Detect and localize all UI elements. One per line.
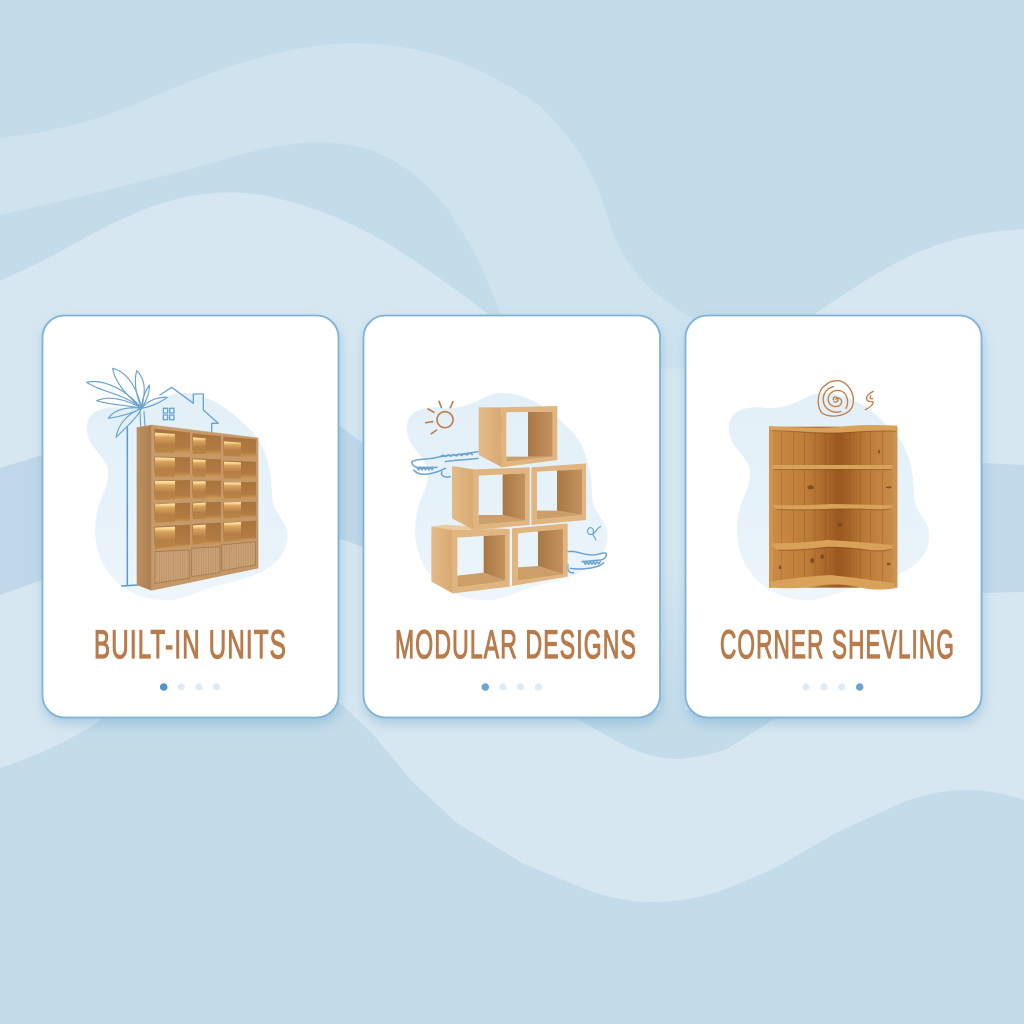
compartment bases: [154, 429, 256, 549]
card background 2: [364, 316, 660, 718]
corner shelf unit: [769, 425, 897, 590]
icon: palm and house sketch: [87, 368, 218, 586]
pagination dots 1: [160, 683, 220, 691]
card background 3: [686, 316, 982, 718]
title: built-in units: BUILT-IN UNITS: [94, 623, 287, 667]
blob 3: [729, 393, 929, 600]
panel: corner shelving: [686, 316, 982, 718]
icon: spiral wind: [818, 381, 873, 416]
title: modular designs: MODULAR DESIGNS: [395, 623, 637, 667]
blob 2: [407, 393, 607, 600]
knots: [779, 450, 892, 569]
icon: crocodile sketches: [412, 452, 606, 573]
cabinet doors: [155, 542, 255, 583]
panel: modular designs: [364, 316, 660, 718]
icon: sun: [426, 401, 453, 434]
panel: built-in units: [42, 316, 338, 718]
stacked wooden cubes: [431, 406, 586, 593]
plank lines: [781, 432, 882, 583]
shelves: [769, 425, 897, 590]
blob 1: [87, 393, 287, 600]
card background 1: [42, 316, 338, 718]
cube top: [479, 406, 557, 467]
pagination dots 3: [802, 683, 864, 691]
cube bottom left: [431, 525, 510, 593]
cube middle right: [531, 463, 586, 525]
shelf shadows: [771, 431, 896, 551]
pagination dots 2: [482, 683, 542, 691]
cube bottom right: [512, 523, 568, 586]
lit back panels: [155, 433, 241, 549]
bookcase with lit shelves: [137, 425, 258, 591]
cube middle left: [452, 466, 530, 530]
